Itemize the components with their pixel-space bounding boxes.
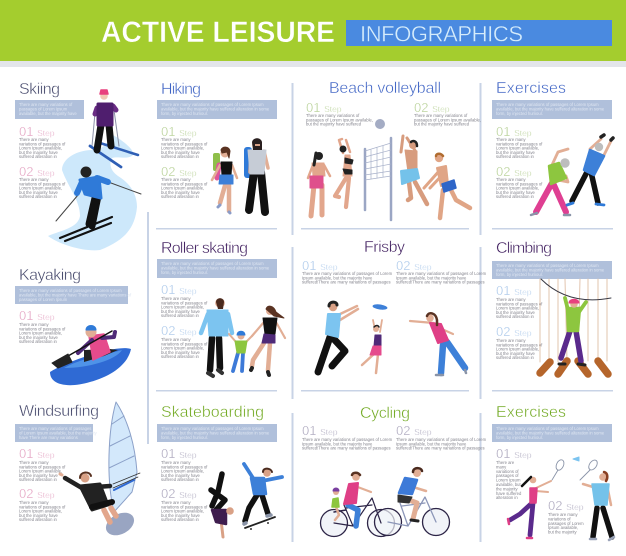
step 02 xyxy=(496,324,543,360)
step 01: variations of passages of xyxy=(496,141,543,146)
step 02: suffered alteration in xyxy=(496,355,535,360)
header banner xyxy=(0,0,626,67)
description box: There are many variations of passages of Lorem Ipsum xyxy=(496,102,599,107)
step 02: 02 Step xyxy=(396,423,432,438)
step 01: suffered alteration in xyxy=(19,477,58,482)
step 01: There are many xyxy=(161,137,191,142)
step 01: 01 Step xyxy=(19,124,55,139)
description box: passages of Lorem Ipsum xyxy=(19,106,68,112)
step 01: There are many variations of xyxy=(306,113,359,118)
step 01: Lorem Ipsum available, xyxy=(161,469,204,474)
step 01: There are many xyxy=(496,137,526,142)
step 02: Lorem Ipsum available, xyxy=(161,346,204,351)
step 01: 01 Step xyxy=(496,124,532,139)
step 02: suffered!There are many variations of passages xyxy=(396,446,485,451)
step 02: Lorem Ipsum available, xyxy=(496,347,539,352)
illustration: kayaker xyxy=(50,326,131,385)
icon: frisbee xyxy=(372,303,388,311)
step 02 xyxy=(548,498,584,535)
step 02: but the majority have xyxy=(496,351,536,356)
step 01: passages of Lorem Ipsum available, xyxy=(306,117,373,122)
step 02: 02 Step xyxy=(396,258,432,273)
step 02: variations of passages of xyxy=(161,181,208,186)
step 02 xyxy=(19,486,66,522)
step 02: variations of passages of xyxy=(19,181,66,186)
step 02: 02 Step xyxy=(19,164,55,179)
heading: windsurfing: Windsurfing xyxy=(19,403,99,420)
step 02: There are many xyxy=(548,512,578,517)
panel: cycling xyxy=(302,405,487,536)
step 01: Lorem Ipsum available, xyxy=(19,469,62,474)
subtitle box xyxy=(346,20,612,46)
step 02 xyxy=(161,486,208,522)
step 01: 01 Step xyxy=(19,446,55,461)
heading: roller skating: Roller skating xyxy=(161,240,248,257)
heading: skateboarding: Skateboarding xyxy=(161,404,264,421)
step 02: There are many variations of passages of Lorem xyxy=(396,437,486,442)
step 01: but the majority have xyxy=(19,473,59,478)
step 02: suffered alteration in xyxy=(161,517,200,522)
step 02: There are many xyxy=(496,177,526,182)
step 01: Ipsum available, but the majority have xyxy=(302,275,373,280)
panel: skiing xyxy=(15,81,141,250)
panel: roller skating xyxy=(157,240,285,376)
step 01: 01 Step xyxy=(19,308,55,323)
step 02: 02 Step xyxy=(414,100,450,115)
heading: kayaking: Kayaking xyxy=(19,267,81,284)
step 02 xyxy=(496,164,543,199)
step 01: variations of passages of xyxy=(19,464,66,469)
step 01: There are many xyxy=(19,460,49,465)
description box: There are many variations of passages of Lorem Ipsum xyxy=(496,426,599,431)
step 01: but the majority have xyxy=(496,310,536,315)
step 01: Lorem Ipsum xyxy=(496,478,521,483)
step 01: There are many variations of passages of Lorem xyxy=(302,271,392,276)
step 01: There are many xyxy=(19,322,49,327)
step 01: but the majority have xyxy=(161,309,201,314)
step 01 xyxy=(302,423,393,451)
step 01 xyxy=(302,258,393,285)
step 01 xyxy=(161,124,208,159)
step 01: There are many xyxy=(19,137,49,142)
illustration: family on roller skates xyxy=(201,298,285,376)
step 01: There are xyxy=(496,460,514,465)
heading: hiking: Hiking xyxy=(161,81,201,98)
step 02: but the majority have xyxy=(161,190,201,195)
step 02: suffered alteration in xyxy=(496,194,535,199)
illustration: skateboarders xyxy=(211,464,282,537)
description box: There are many variations of passages of Lorem Ipsum xyxy=(19,288,122,293)
step 02: There are many xyxy=(161,337,191,342)
icon: volleyball xyxy=(375,119,385,129)
heading: cycling: Cycling xyxy=(360,405,410,422)
description box: form, by injected humour. xyxy=(496,435,543,440)
step 02: but the majority xyxy=(548,530,578,535)
description box: There are many variations of xyxy=(19,102,72,107)
illustration: frisbee players xyxy=(318,302,466,375)
step 01: Lorem Ipsum available, xyxy=(19,331,62,336)
step 01: suffered!There are many variations of passages xyxy=(302,446,391,451)
panel: exercises badminton xyxy=(492,404,614,540)
illustration: badminton players xyxy=(508,457,614,540)
step 01 xyxy=(496,124,543,159)
description box: There are many variations of passages of Lorem Ipsum xyxy=(496,263,599,268)
illustration: windsurfer xyxy=(60,402,140,540)
step 02: variations of xyxy=(548,516,571,521)
description box xyxy=(157,259,277,278)
step 01: many xyxy=(496,464,507,469)
step 01: passages of xyxy=(496,473,519,478)
step 02: suffered!There are many variations of passages xyxy=(396,280,485,285)
panel: beach volleyball xyxy=(306,80,481,220)
step 01: suffered alteration in xyxy=(496,314,535,319)
step 01: variations of xyxy=(496,469,519,474)
heading: skiing: Skiing xyxy=(19,81,60,98)
step 01: 01 Step xyxy=(161,282,197,297)
step 01: 01 Step xyxy=(302,423,338,438)
description box xyxy=(492,100,612,119)
heading: climbing: Climbing xyxy=(496,240,552,257)
panel: climbing xyxy=(492,240,612,374)
step 02: 02 Step xyxy=(496,324,532,339)
step 02: There are many xyxy=(496,338,526,343)
description box: available, but the majority have suffered alteration in some xyxy=(161,266,270,270)
description box: available, but the majority have suffered alteration in some xyxy=(496,430,605,436)
description box: available, but the majority have xyxy=(19,111,77,116)
step 02: variations of passages of xyxy=(496,181,543,186)
illustration: rope course climber xyxy=(540,279,611,374)
step 01: 01 Step xyxy=(161,124,197,139)
step 01 xyxy=(19,308,66,344)
step 01: the majority xyxy=(496,486,519,491)
step 01: variations of passages of xyxy=(161,464,208,469)
step 01: but the majority have xyxy=(19,150,59,155)
step 02: but the majority have xyxy=(161,350,201,355)
description box: passages of Lorem Ipsum xyxy=(19,297,68,302)
step 01: variations of passages of xyxy=(161,300,208,305)
panel: skateboarding xyxy=(157,404,282,537)
panel: hiking xyxy=(157,81,277,213)
step 01: suffered alteration in xyxy=(19,154,58,159)
step 02 xyxy=(19,164,66,199)
panel: kayaking xyxy=(15,267,132,385)
step 01 xyxy=(496,446,532,500)
step 02 xyxy=(161,323,208,359)
heading: exercises: Exercises xyxy=(496,80,566,97)
step 01 xyxy=(161,446,208,482)
step 01: suffered!There are many variations of passages xyxy=(302,280,391,285)
step 01: There are many xyxy=(161,296,191,301)
step 01: 01 Step xyxy=(302,258,338,273)
step 02: but the majority have xyxy=(19,190,59,195)
step 02: 02 Step xyxy=(161,486,197,501)
description box: There are many variations of passages of Lorem Ipsum xyxy=(161,261,264,266)
step 01: Lorem Ipsum available, xyxy=(161,146,204,151)
illustration: net xyxy=(365,138,391,220)
description box: available, but the majority have suffered alteration in some xyxy=(161,430,270,436)
step 02: Ipsum available, xyxy=(548,525,578,530)
step 02: variations of passages of xyxy=(161,504,208,509)
step 01: available, but xyxy=(496,482,522,487)
description box: There are many variations of passages xyxy=(19,426,91,431)
step 02: suffered alteration in xyxy=(161,194,200,199)
description box xyxy=(15,424,98,442)
step 01: but the majority have xyxy=(19,335,59,340)
description box: form, by injected humour. xyxy=(496,111,543,116)
description box: available, but the majority have suffered alteration in some xyxy=(161,106,270,112)
step 02: 02 Step xyxy=(496,164,532,179)
step 02: 02 Step xyxy=(161,323,197,338)
step 01: variations of passages of xyxy=(19,326,66,331)
description box: available, but the majority have There are many variations of xyxy=(19,292,132,298)
step 01: variations of passages of xyxy=(161,141,208,146)
step 02: but the majority have xyxy=(496,190,536,195)
step 02: variations of passages of xyxy=(161,341,208,346)
step 01: Lorem Ipsum available, xyxy=(496,306,539,311)
step 01: Lorem Ipsum available, xyxy=(161,305,204,310)
step 01: suffered alteration in xyxy=(161,154,200,159)
panel: exercises xyxy=(492,80,613,215)
description box xyxy=(492,424,612,442)
subtitle box: INFOGRAPHICS xyxy=(360,22,523,46)
step 02: Lorem Ipsum available, xyxy=(19,186,62,191)
step 02: 02 Step xyxy=(548,498,584,513)
step 02 xyxy=(161,164,208,199)
step 01: There are many xyxy=(496,297,526,302)
step 01: alteration in xyxy=(496,495,518,500)
step 02: Lorem Ipsum available, xyxy=(161,509,204,514)
step 02: 02 Step xyxy=(19,486,55,501)
step 01: variations of passages of xyxy=(496,301,543,306)
step 01 xyxy=(306,100,373,127)
step 01: 01 Step xyxy=(496,446,532,461)
step 01: Lorem Ipsum available, xyxy=(496,146,539,151)
step 01: suffered alteration in xyxy=(161,313,200,318)
step 01: Lorem Ipsum available, xyxy=(19,146,62,151)
step 02: There are many variations of xyxy=(414,113,467,118)
step 02: Lorem Ipsum available, xyxy=(496,186,539,191)
step 02: but the majority have xyxy=(19,513,59,518)
illustration: two skiers on snow slope xyxy=(48,90,141,250)
step 01 xyxy=(161,282,208,318)
step 02 xyxy=(414,100,481,127)
step 01: variations of passages of xyxy=(19,141,66,146)
step 02: but the majority have xyxy=(161,513,201,518)
description box: available, but the majority have suffered alteration in some xyxy=(496,106,605,112)
step 01: suffered alteration in xyxy=(496,154,535,159)
description box: form, by injected humour. xyxy=(161,270,208,275)
step 02: There are many xyxy=(161,500,191,505)
description box: form, by injected humour. xyxy=(161,435,208,440)
step 02: suffered alteration in xyxy=(161,354,200,359)
step 01 xyxy=(19,124,66,159)
step 02: but the majority have suffered xyxy=(414,122,470,127)
description box xyxy=(15,100,84,119)
step 01: but the majority have xyxy=(496,150,536,155)
illustration: two hikers xyxy=(212,138,268,213)
step 02: Ipsum available, but the majority have xyxy=(396,441,467,446)
description box: available, but the majority have suffered alteration in some xyxy=(496,268,605,272)
step 01: 01 Step xyxy=(306,100,342,115)
description box xyxy=(15,286,132,304)
step 02: suffered alteration in xyxy=(19,517,58,522)
illustration: family cycling xyxy=(320,468,450,536)
description box: form, by injected humour. xyxy=(496,272,543,277)
step 02: There are many xyxy=(19,500,49,505)
step 02: There are many xyxy=(19,177,49,182)
description box xyxy=(157,424,277,442)
step 01: have suffered xyxy=(496,491,522,496)
description box: form, by injected humour. xyxy=(161,111,208,116)
icon: shuttlecock xyxy=(573,457,579,461)
step 01 xyxy=(496,283,543,319)
step 02 xyxy=(396,258,487,285)
step 01: but the majority have xyxy=(161,473,201,478)
step 01: but the majority have suffered xyxy=(306,122,362,127)
description box: There are many variations of passages of Lorem Ipsum xyxy=(161,102,264,107)
illustration: volleyball players xyxy=(308,136,470,218)
step 02: suffered alteration in xyxy=(19,194,58,199)
step 01: There are many variations of passages of Lorem xyxy=(302,437,392,442)
step 02: passages of Lorem Ipsum available, xyxy=(414,117,481,122)
step 02: Lorem Ipsum available, xyxy=(161,186,204,191)
step 01: suffered alteration in xyxy=(161,477,200,482)
step 02: variations of passages of xyxy=(19,504,66,509)
step 01: 01 Step xyxy=(496,283,532,298)
description box: There are many variations of passages of Lorem Ipsum xyxy=(161,426,264,431)
heading: exercises: Exercises xyxy=(496,404,566,421)
step 01: There are many xyxy=(161,460,191,465)
panel: windsurfing xyxy=(15,402,140,540)
description box xyxy=(492,261,612,279)
step 02: Ipsum available, but the majority have xyxy=(396,275,467,280)
heading: frisby: Frisby xyxy=(364,239,405,256)
step 02: There are many variations of passages of Lorem xyxy=(396,271,486,276)
step 01: 01 Step xyxy=(161,446,197,461)
title: ACTIVE LEISURE xyxy=(101,16,335,49)
step 01: Ipsum available, but the majority have xyxy=(302,441,373,446)
heading: beach volleyball: Beach volleyball xyxy=(329,80,441,97)
illustration: stretching seniors xyxy=(531,135,613,215)
step 02: passages of Lorem xyxy=(548,521,584,526)
step 01: suffered alteration in xyxy=(19,339,58,344)
step 01 xyxy=(19,446,66,482)
panel: frisby xyxy=(302,239,487,375)
step 02 xyxy=(396,423,487,451)
description box xyxy=(157,100,277,119)
step 02: variations of passages of xyxy=(496,342,543,347)
description box: have There are many variations xyxy=(19,435,78,440)
description box: of Lorem Ipsum available, but the majority xyxy=(19,430,98,436)
step 02: Lorem Ipsum available, xyxy=(19,509,62,514)
step 01: but the majority have xyxy=(161,150,201,155)
step 02: There are many xyxy=(161,177,191,182)
step 02: 02 Step xyxy=(161,164,197,179)
